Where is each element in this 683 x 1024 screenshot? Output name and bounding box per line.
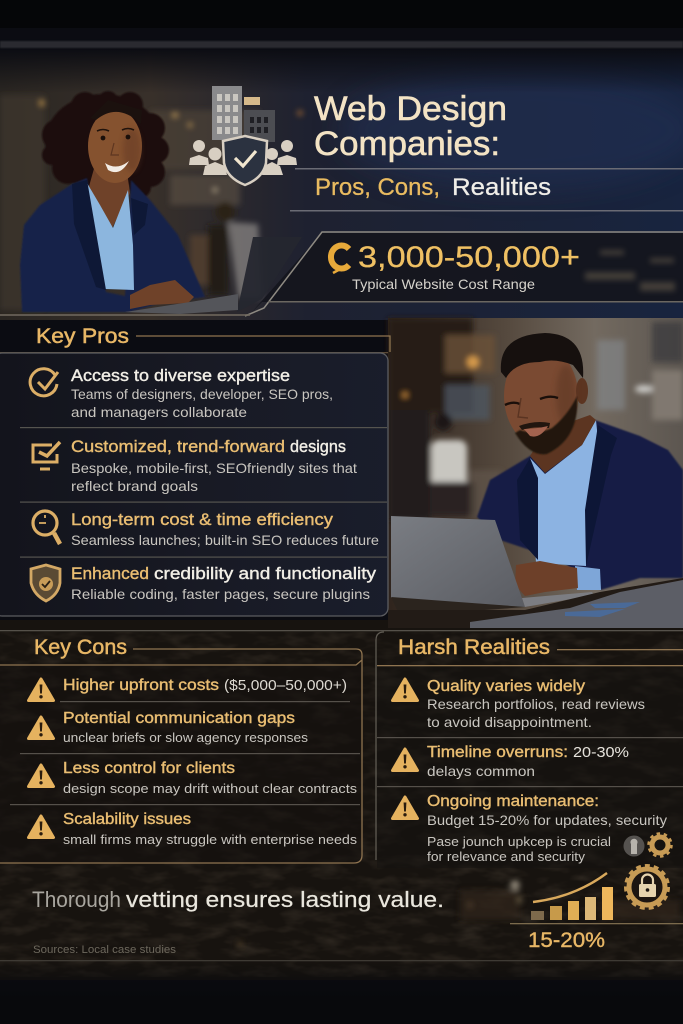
chart: rising bars 15-20% — [510, 873, 683, 952]
bottom edge of header — [0, 314, 250, 316]
row: quality varies: Research portfolios, read reviews — [427, 696, 645, 712]
row: scalability: small firms may struggle with enterprise needs — [63, 832, 358, 847]
smile — [105, 161, 129, 172]
baseline — [510, 923, 683, 924]
icon: edit monitor — [33, 442, 60, 469]
panel: website cost range — [245, 232, 683, 316]
row: timeline overruns: Timeline overruns: — [427, 744, 568, 761]
photo: man in navy blazer working on laptop — [388, 333, 683, 628]
heading rule — [136, 336, 390, 352]
frame — [376, 632, 384, 860]
row: quality varies: Quality varies widely — [427, 678, 585, 695]
row: timeline overruns: 20-30% — [573, 744, 629, 761]
hand — [130, 280, 194, 309]
row: diverse expertise: and managers collaborate — [71, 404, 247, 420]
row: customized designs: designs — [290, 437, 346, 456]
shirt — [530, 420, 598, 566]
background: dim city lights lower section — [0, 632, 683, 1024]
row: scalability — [28, 811, 358, 847]
row: cost and time efficiency: Long-term cost & time efficiency — [71, 510, 334, 529]
row: communication gaps: Potential communication gaps — [63, 710, 295, 727]
row: less control — [28, 760, 358, 796]
closing statement: Thorough — [32, 887, 121, 912]
sources note: Sources: Local case studies — [33, 944, 177, 956]
table and documents — [388, 578, 683, 628]
row: ongoing maintenance: Budget 15-20% for updates, security — [427, 812, 667, 828]
row: upfront costs — [28, 677, 347, 700]
row: ongoing maintenance: Ongoing maintenance: — [427, 793, 599, 810]
cost figure: 3,000-50,000+ — [358, 241, 580, 274]
row: customized designs — [33, 437, 357, 494]
lapels — [72, 180, 106, 290]
photo: smiling woman in navy blazer at laptop — [20, 91, 302, 314]
row: customized designs: reflect brand goals — [71, 478, 198, 494]
row: communication gaps — [28, 710, 309, 745]
bottom rule — [0, 960, 683, 961]
subtitle — [315, 174, 551, 201]
row: credibility and functionality: Reliable coding, faster pages, secure plugins — [71, 586, 370, 602]
icon: office buildings, team and shield — [189, 86, 297, 185]
row: communication gaps: unclear briefs or slow agency responses — [63, 730, 309, 745]
neck — [530, 415, 596, 473]
row: ongoing maintenance — [392, 793, 667, 864]
row: ongoing maintenance: for relevance and security — [427, 849, 586, 864]
hair — [501, 333, 583, 378]
city light speckles — [585, 250, 675, 291]
row: less control: Less control for clients — [63, 760, 235, 777]
background: blurred office behind man — [388, 318, 683, 628]
divider line — [290, 210, 683, 212]
hand and cuff — [575, 566, 601, 590]
row: diverse expertise: Access to diverse expertise — [71, 366, 290, 385]
icon: target check — [30, 369, 58, 396]
icon: magnifier clock — [33, 511, 60, 544]
face — [88, 109, 142, 183]
row: credibility and functionality — [31, 564, 377, 602]
title: Web Design — [314, 90, 507, 128]
panel — [0, 353, 388, 616]
lapels — [585, 425, 617, 566]
section: Key Cons — [0, 636, 362, 863]
row: credibility and functionality: Enhanced — [71, 564, 149, 583]
row: cost and time efficiency: Seamless launches; built-in SEO reduces future — [71, 532, 379, 548]
icon: key badge — [624, 836, 644, 856]
title: Companies: — [314, 125, 500, 163]
hair — [42, 91, 169, 198]
row: ongoing maintenance: Pase jounch upkcep is crucial — [427, 834, 611, 849]
blazer — [20, 178, 205, 312]
section: Key Pros — [0, 325, 390, 616]
row: cost and time efficiency — [33, 510, 379, 548]
row: timeline overruns — [392, 744, 629, 779]
background: blurred office behind woman — [0, 95, 303, 310]
row: upfront costs: Higher upfront costs — [63, 677, 219, 694]
row: customized designs: Bespoke, mobile-first, SEOfriendly sites that — [71, 460, 357, 476]
panel — [377, 665, 683, 868]
subtitle: Pros, Cons, — [315, 174, 440, 201]
divider line — [295, 168, 683, 170]
icon: gear lock — [626, 866, 668, 908]
heading: Key Cons — [34, 636, 127, 659]
icon: currency sign — [331, 246, 349, 273]
row: customized designs: Customized, trend-forward — [71, 437, 285, 456]
eyes and mouth — [505, 397, 558, 405]
row: diverse expertise — [30, 366, 333, 420]
shirt — [87, 183, 134, 290]
closing statement: vetting ensures lasting value. — [126, 887, 444, 912]
row: quality varies: to avoid disappointment. — [427, 714, 592, 730]
subtitle: Realities — [452, 174, 551, 201]
bars — [531, 911, 544, 920]
cost caption: Typical Website Cost Range — [352, 276, 535, 292]
row: upfront costs: ($5,000–50,000+) — [224, 677, 347, 694]
row: quality varies — [392, 678, 645, 730]
laptop — [237, 237, 302, 312]
row: timeline overruns: delays common — [427, 763, 535, 779]
frame — [0, 649, 362, 863]
row: less control: design scope may drift without clear contracts — [63, 781, 358, 796]
row: scalability: Scalability issues — [63, 811, 191, 828]
section: Harsh Realities — [376, 632, 683, 908]
row: diverse expertise: Teams of designers, developer, SEO pros, — [71, 386, 333, 402]
beard — [515, 396, 577, 454]
head — [504, 346, 578, 446]
heading: Key Pros — [36, 325, 129, 348]
trend curve — [533, 873, 607, 902]
value: 15-20% — [528, 929, 605, 952]
closing statement — [32, 887, 444, 912]
icon: shield check — [31, 565, 60, 601]
heading: Harsh Realities — [398, 636, 550, 659]
row: credibility and functionality: credibility and functionality — [154, 564, 377, 583]
laptop — [391, 516, 525, 607]
blazer — [477, 420, 683, 590]
section rule above lower panels — [0, 630, 683, 631]
neck — [88, 165, 130, 228]
title — [314, 90, 507, 163]
icon: gear — [648, 834, 672, 856]
panel — [0, 665, 362, 863]
